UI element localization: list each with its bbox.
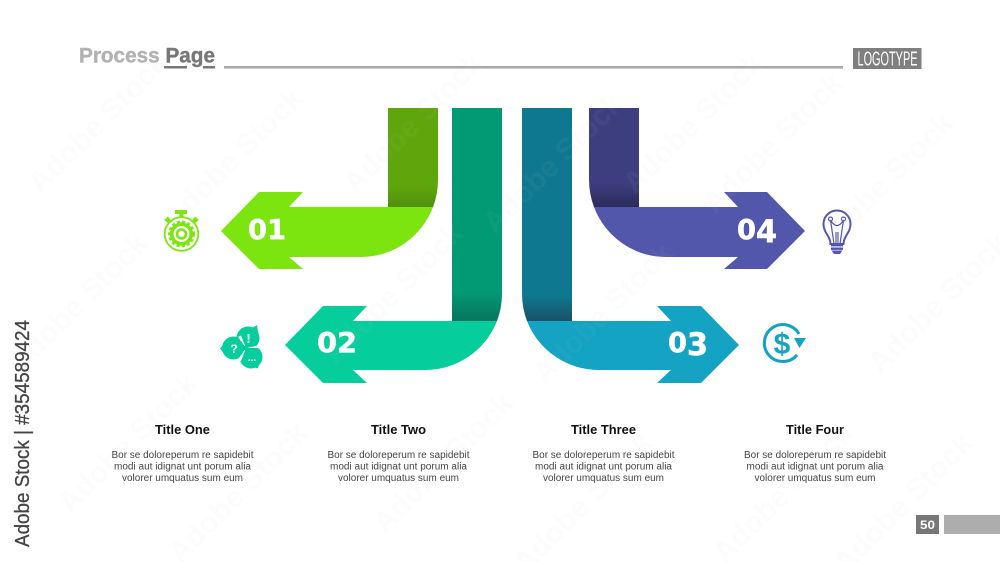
icon: dollar refresh: $ [774,328,791,361]
text block: title one: Bor se doloreperum re sapidebit [112,450,254,461]
title: Process Page [79,44,215,68]
watermark: Adobe Stock [477,87,630,240]
icon: speech bubbles: ? [230,342,238,356]
watermark: Adobe Stock [527,237,680,390]
icon: speech bubbles: ! [246,331,251,346]
text block: title two [328,423,470,484]
page number: 50 [920,518,935,532]
text block: title three: modi aut idignat unt porum alia [535,462,673,472]
icon: stopwatch with gear [164,210,199,251]
text block: title four: modi aut idignat unt porum alia [746,462,884,472]
text block: title two: modi aut idignat unt porum alia [330,462,468,472]
text block: title one: Title One [155,423,210,437]
text block: title three: volorer umquatus sum eum [543,473,664,484]
arrow 01 [221,108,438,269]
watermark: Adobe Stock [807,107,960,260]
arrow 04 [589,108,805,269]
number 01: 01 [248,213,286,246]
text block: title two: Title Two [371,423,426,437]
watermark: Adobe Stock [367,387,520,540]
arrow 02 [285,108,502,383]
watermark: Adobe Stock [2,227,155,380]
watermark: Adobe Stock [52,367,205,520]
watermark: Adobe Stock [337,47,490,200]
text block: title four: Title Four [786,423,844,437]
number 03: 0 [668,326,687,359]
logotype [853,48,922,70]
icon: dollar refresh [764,325,806,362]
icon: speech bubbles [220,325,262,368]
number 04: 0 [737,213,756,246]
page number [916,515,939,534]
watermark: Adobe Stock [317,217,470,370]
arrow 03 [522,108,739,383]
watermark: Adobe Stock [157,82,310,235]
icon: light bulb [824,210,850,254]
text block: title three: Bor se doloreperum re sapidebit [532,450,675,461]
text block: title two: Bor se doloreperum re sapidebit [328,450,470,461]
number 02: 02 [317,326,357,359]
logotype: LOGOTYPE [858,48,918,70]
text block: title three: Title Three [571,423,636,437]
number 04: 4 [756,214,777,250]
watermark: Adobe Stock [697,67,850,220]
text block: title four [744,423,886,484]
stock id side text: Adobe Stock | #354589424 [12,320,34,547]
text block: title four: Bor se doloreperum re sapidebit [744,450,886,461]
text block: title two: volorer umquatus sum eum [338,473,459,484]
number 03: 3 [687,327,708,363]
text block: title three [532,423,675,484]
text block: title four: volorer umquatus sum eum [754,473,876,484]
watermark: Adobe Stock [22,47,175,200]
text block: title one: modi aut idignat unt porum alia [114,462,252,472]
icon: speech bubbles: ... [248,353,256,364]
watermark: Adobe Stock [617,47,770,200]
text block: title one [112,423,254,484]
text block: title one: volorer umquatus sum eum [122,473,243,484]
